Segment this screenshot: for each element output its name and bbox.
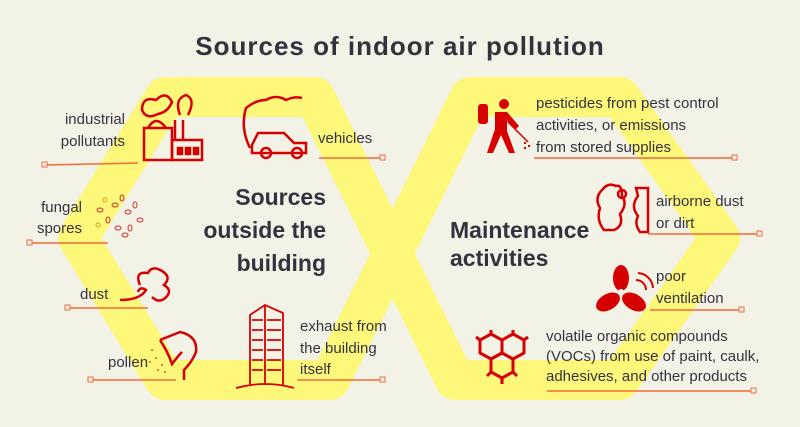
heading: sources outside: Sources bbox=[235, 184, 326, 210]
label: airborne dust bbox=[648, 193, 762, 236]
label: exhaust: exhaust from bbox=[300, 318, 387, 335]
label: industrial pollutants bbox=[42, 111, 138, 167]
label: fungal spores: spores bbox=[37, 220, 82, 237]
label: exhaust: the building bbox=[300, 340, 377, 357]
label: pesticides: activities, or emissions bbox=[536, 117, 686, 134]
icon: car bbox=[244, 97, 306, 158]
label: pollen bbox=[88, 354, 176, 382]
label: poor ventilation: poor bbox=[656, 268, 686, 285]
label: exhaust bbox=[297, 318, 387, 382]
icon: dust dirt bbox=[597, 185, 648, 232]
label: poor ventilation bbox=[650, 268, 744, 312]
label: pesticides: pesticides from pest control bbox=[536, 95, 719, 112]
heading: maintenance bbox=[450, 217, 589, 271]
label: VOCs: (VOCs) from use of paint, caulk, bbox=[546, 348, 759, 365]
label: vehicles bbox=[318, 130, 385, 160]
heading: sources outside: building bbox=[237, 250, 326, 276]
heading: sources outside bbox=[203, 184, 326, 276]
label: VOCs: adhesives, and other products bbox=[546, 368, 747, 385]
label: airborne dust: airborne dust bbox=[656, 193, 744, 210]
title: Sources of indoor air pollution bbox=[195, 31, 605, 61]
icon: VOC molecule bbox=[476, 330, 528, 384]
label: fungal spores bbox=[27, 199, 108, 245]
label: industrial pollutants: industrial bbox=[65, 111, 125, 128]
label: pesticides bbox=[534, 95, 737, 160]
label: vehicles: vehicles bbox=[318, 130, 372, 147]
heading: maintenance: Maintenance bbox=[450, 217, 589, 243]
icon: fan bbox=[593, 265, 653, 315]
icon: building bbox=[236, 305, 294, 388]
icon: dust cloud bbox=[120, 268, 169, 301]
label: dust bbox=[65, 286, 148, 310]
icon: spores bbox=[96, 195, 143, 237]
label: VOCs bbox=[546, 328, 759, 393]
icon: factory bbox=[142, 95, 202, 160]
label: VOCs: volatile organic compounds bbox=[546, 328, 728, 345]
yellow infinity band bbox=[78, 97, 720, 380]
label: pesticides: from stored supplies bbox=[536, 139, 671, 156]
label: poor ventilation: ventilation bbox=[656, 290, 724, 307]
heading: maintenance: activities bbox=[450, 245, 548, 271]
icon: flower bbox=[149, 332, 196, 380]
label: fungal spores: fungal bbox=[41, 199, 82, 216]
label: industrial pollutants: pollutants bbox=[61, 133, 125, 150]
label: dust: dust bbox=[80, 286, 109, 303]
label: airborne dust: or dirt bbox=[656, 215, 695, 232]
icon: pest sprayer bbox=[478, 99, 530, 153]
label: pollen: pollen bbox=[108, 354, 148, 371]
heading: sources outside: outside the bbox=[203, 217, 326, 243]
label: exhaust: itself bbox=[300, 361, 332, 378]
